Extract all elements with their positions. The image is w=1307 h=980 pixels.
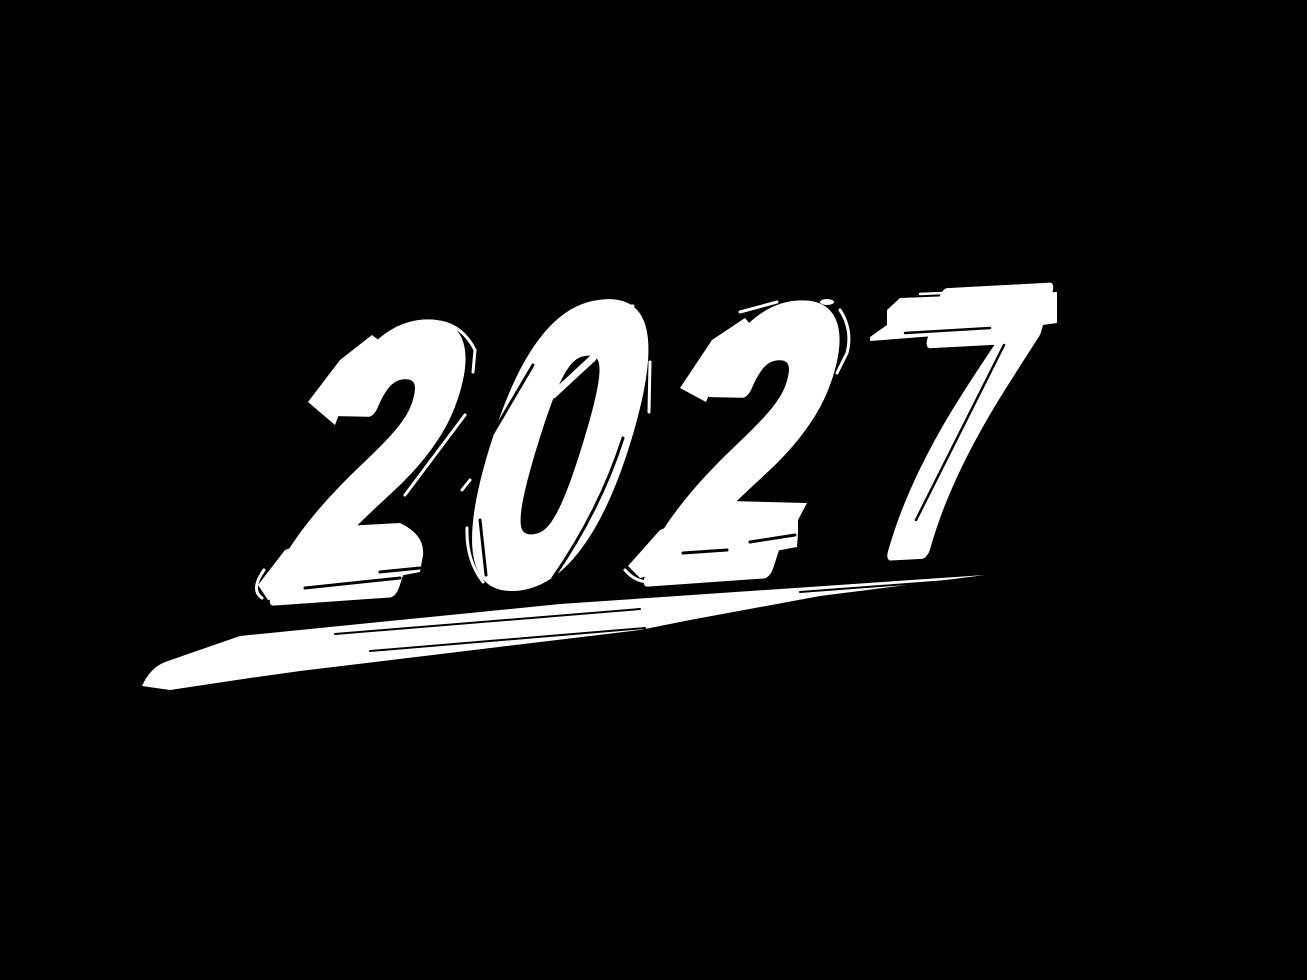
digit 0: 0 <box>416 222 704 668</box>
title: brush-lettered year 2027 <box>242 211 1080 677</box>
digit 7: 7 <box>839 211 1080 632</box>
digit 2 (second): 2 <box>616 227 888 658</box>
underline brush stroke <box>142 575 985 690</box>
digit 2 (first): 2 <box>242 246 514 677</box>
